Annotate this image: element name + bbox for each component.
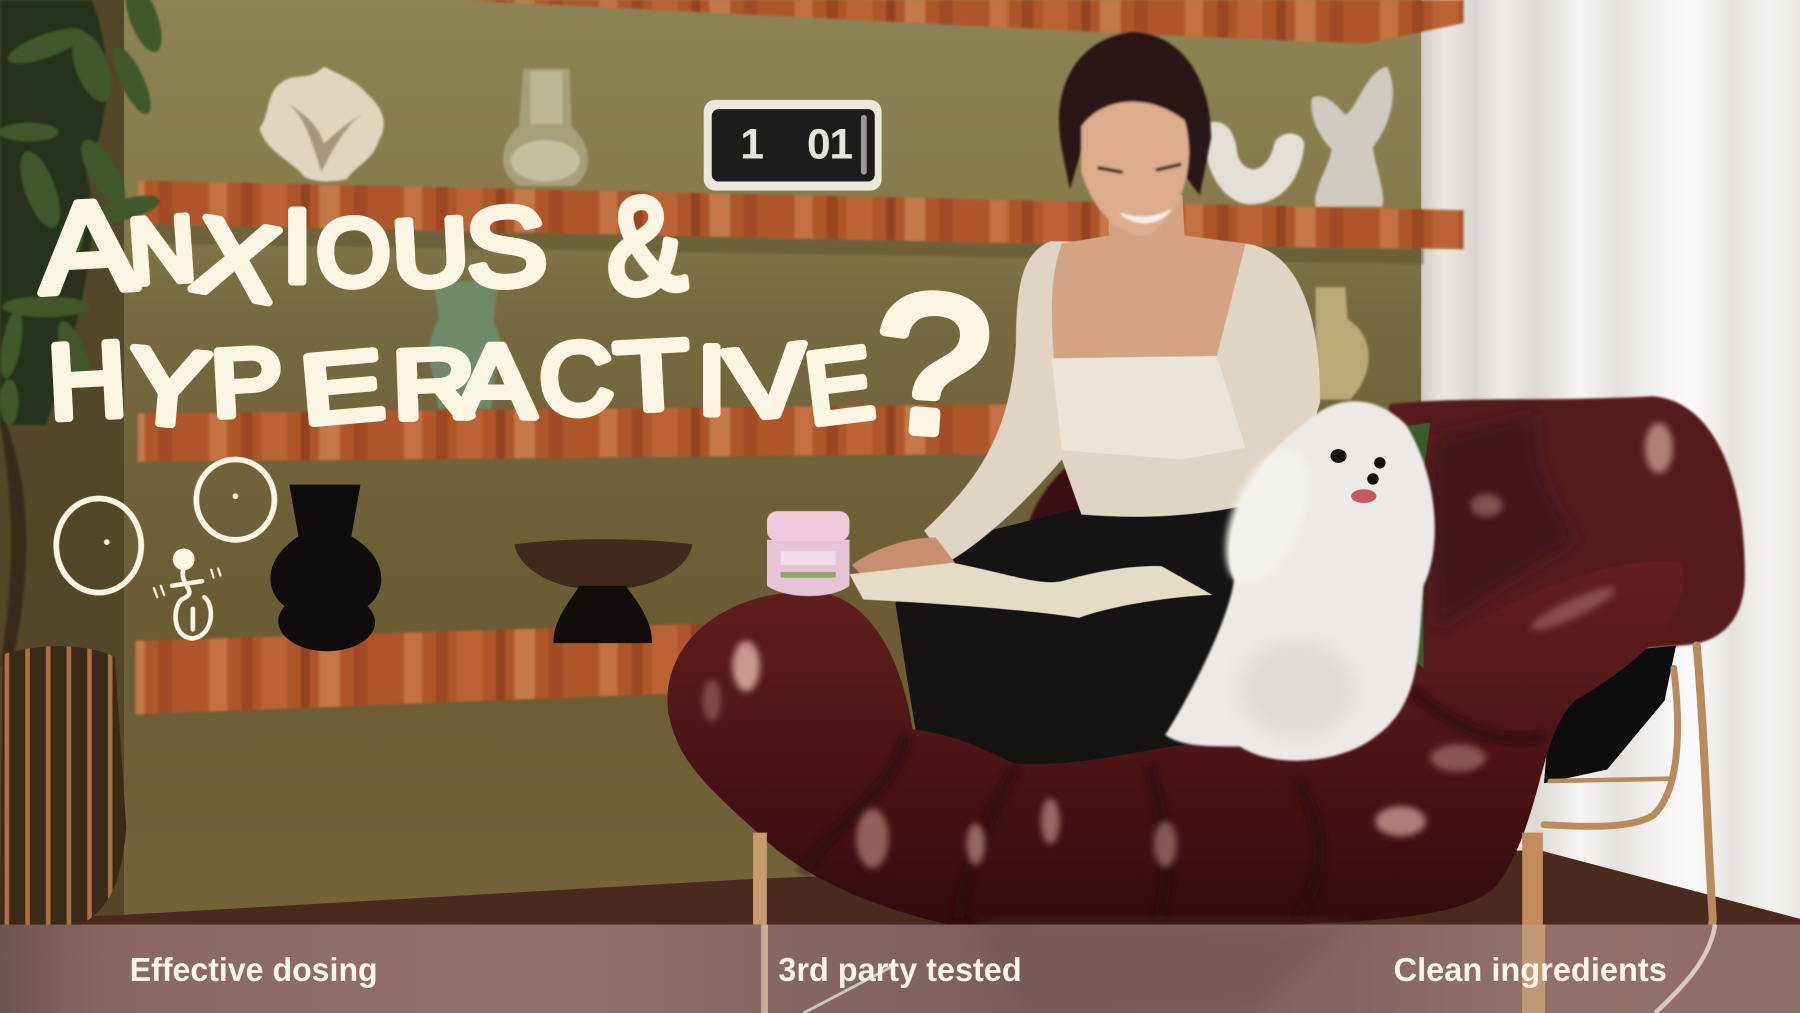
chair black cushion: [1544, 645, 1676, 783]
green cushion: [1395, 423, 1430, 668]
headline line 2: E: [799, 327, 879, 446]
leather highlights: [703, 423, 1673, 868]
headline line 1: X: [185, 195, 287, 325]
benefit: 3rd party tested: 3rd party tested: [778, 952, 1022, 989]
benefit: effective dosing: Effective dosing: [130, 952, 378, 989]
middle wooden shelf: [138, 404, 1016, 462]
curtain: [1421, 0, 1800, 919]
headline line 1: I: [282, 187, 312, 303]
woman's trousers: [895, 505, 1251, 798]
sweater bodice: [1052, 356, 1246, 459]
clock digits: 1: [740, 121, 764, 168]
chair legs: [760, 833, 1533, 925]
chair metal frame: [1544, 645, 1713, 1013]
branch vase: [1311, 67, 1393, 207]
headline line 2: Y: [123, 325, 214, 450]
floor: [0, 850, 1800, 1013]
upper thought bubble: [196, 459, 274, 540]
headline line 1: O: [314, 198, 393, 307]
headline line 1: S: [463, 184, 550, 311]
U-shaped vase: [1204, 122, 1304, 204]
headline line 2: C: [537, 322, 616, 437]
left wall column: [0, 0, 124, 925]
headline line 1: U: [390, 198, 471, 307]
lower wooden shelf: [135, 624, 700, 714]
jar of supplement: [767, 511, 849, 596]
dark bowl on stand: [514, 539, 692, 643]
neck and chest skin: [1052, 195, 1246, 358]
benefit: clean ingredients: Clean ingredients: [1394, 952, 1667, 989]
headline line 2: A: [457, 323, 535, 439]
top wooden shelf: [138, 0, 1464, 264]
leather armchair back: [1010, 396, 1745, 666]
leather armchair seat: [667, 423, 1684, 926]
cream vase: [1309, 287, 1369, 400]
wicker pot: [0, 646, 126, 939]
headline line 2: R: [391, 330, 477, 439]
fluffy white dog: [1165, 401, 1435, 761]
doodle: thought bubbles and figure: [56, 459, 274, 639]
headline line 1: [35, 165, 691, 325]
headline line 2: T: [613, 321, 692, 432]
flip clock: 01: [807, 121, 852, 168]
woman's head and hair: [1059, 32, 1211, 236]
green vase: [430, 281, 500, 409]
headline: anxious & hyperactive?: [35, 165, 997, 478]
headline line 1: &: [597, 165, 691, 324]
glass vase: [503, 69, 588, 186]
headline line 1: N: [125, 197, 199, 304]
leather folds: [804, 689, 1544, 919]
small doodle figure: [154, 551, 220, 639]
black vase: [270, 485, 381, 651]
plant: [0, 0, 169, 666]
headline line 2: V: [721, 323, 813, 441]
headline line 2: P: [209, 328, 285, 436]
headline line 2: I: [698, 327, 726, 434]
large thought bubble: [56, 498, 141, 593]
bottom translucent band: [0, 925, 1800, 1013]
woman's hand: [852, 538, 955, 577]
headline line 1: A: [35, 174, 139, 321]
headline line 2: E: [296, 331, 388, 445]
coral vase: [259, 67, 384, 181]
open book: [849, 563, 1212, 618]
dog face: [1330, 449, 1347, 463]
headline line 2: H: [45, 320, 129, 442]
woman's sweater: [924, 195, 1320, 563]
flip clock: [704, 100, 882, 191]
headline line 2: [45, 252, 997, 478]
headline line 2: ?: [867, 252, 997, 478]
